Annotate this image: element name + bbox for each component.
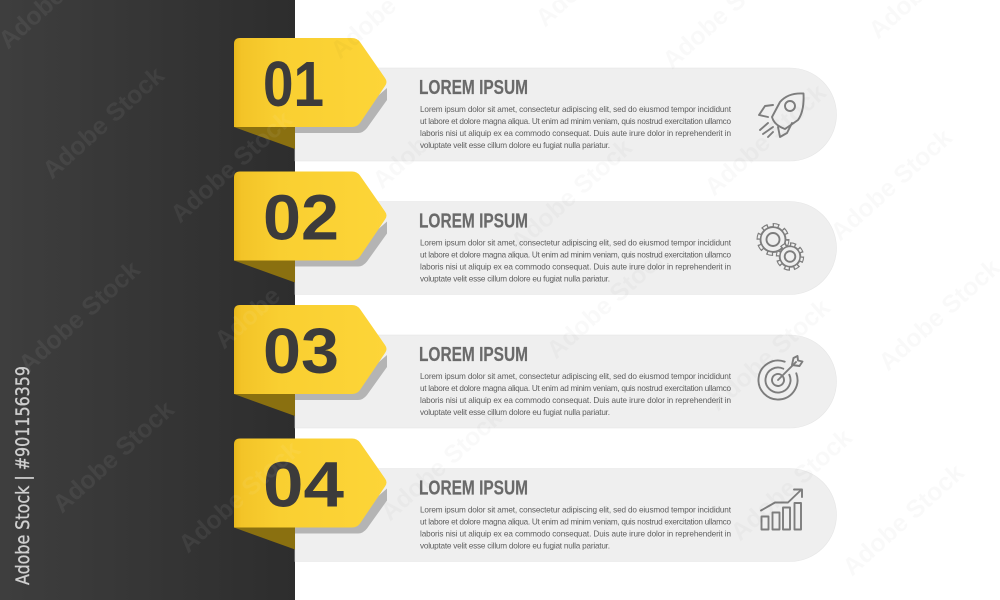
watermark on white area: Adobe Stock xyxy=(725,423,858,546)
row 4 body text xyxy=(420,506,732,550)
row 3 body text: voluptate velit esse cillum dolore eu fugiat nulla pariatur. xyxy=(420,408,610,417)
row 4 body text: voluptate velit esse cillum dolore eu fugiat nulla pariatur. xyxy=(420,542,610,550)
row 4 fold xyxy=(234,528,295,550)
watermark on white area: Adobe Stock xyxy=(375,403,508,526)
row 1: step 01 xyxy=(234,38,836,161)
watermark on white area: Adobe Stock xyxy=(541,241,674,364)
row 3: step 03 xyxy=(234,305,836,428)
row 4 body text: laboris nisi ut aliquip ex ea commodo consequat. Duis aute irure dolor in reprehenderit in xyxy=(420,530,731,538)
watermark on dark panel xyxy=(0,0,306,558)
icon: rising bar chart xyxy=(761,490,802,530)
row 1 heading: LOREM IPSUM xyxy=(419,77,528,99)
row 1 tag shadow xyxy=(295,88,387,133)
row 3 heading: LOREM IPSUM xyxy=(419,344,528,366)
watermark on dark panel: Adobe xyxy=(209,282,286,354)
row 1 body text: Lorem ipsum dolor sit amet, consectetur adipiscing elit, sed do eiusmod tempor incididunt xyxy=(420,105,732,114)
row 3 fold xyxy=(234,394,295,416)
row 2 fold xyxy=(234,260,295,282)
watermark on white area: Adobe xyxy=(367,122,444,194)
row 4 content bar xyxy=(295,468,836,562)
row 2 heading: LOREM IPSUM xyxy=(419,210,528,232)
row 4 number: 04 xyxy=(263,448,344,520)
icon: target with arrow xyxy=(758,356,802,400)
row 2 tag shadow xyxy=(295,222,387,266)
row 2 body text xyxy=(420,238,732,284)
row 3 content bar xyxy=(295,335,836,428)
icon: gears xyxy=(759,225,802,268)
watermark on white area: Adobe Stock xyxy=(837,458,970,581)
row 4 heading: LOREM IPSUM xyxy=(419,478,528,500)
watermark on white area: Adobe Stock xyxy=(703,293,836,416)
row 4: step 04 xyxy=(234,438,836,562)
row 4 yellow number tag xyxy=(234,438,386,528)
row 2 body text: ut labore et dolore magna aliqua. Ut enim ad minim veniam, quis nostrud exercitation ullamco xyxy=(420,250,731,260)
row 3 number: 03 xyxy=(263,315,339,387)
watermark on dark panel: Adobe Stock xyxy=(37,61,170,184)
row 1 body text xyxy=(420,105,732,150)
watermark on white area: Adobe Stock xyxy=(505,133,638,256)
panel: dark left background xyxy=(0,0,295,600)
row 3 tag shadow xyxy=(295,355,387,400)
row 1 body text: voluptate velit esse cillum dolore eu fugiat nulla pariatur. xyxy=(420,141,610,150)
row 2 body text: Lorem ipsum dolor sit amet, consectetur adipiscing elit, sed do eiusmod tempor incididunt xyxy=(420,238,732,248)
row 4 body text: ut labore et dolore magna aliqua. Ut enim ad minim veniam, quis nostrud exercitation ullamco xyxy=(420,518,731,526)
watermark on dark panel: Adobe Stock xyxy=(165,105,298,228)
row 1 body text: ut labore et dolore magna aliqua. Ut enim ad minim veniam, quis nostrud exercitation ullamco xyxy=(420,117,731,126)
vertical stock id text: Adobe Stock | #901156359 xyxy=(12,366,34,585)
watermark on white area: Adobe Stock xyxy=(825,123,958,246)
row 2: step 02 xyxy=(234,172,836,294)
row 2 number: 02 xyxy=(263,182,339,254)
row 3 body text: laboris nisi ut aliquip ex ea commodo consequat. Duis aute irure dolor in reprehenderit in xyxy=(420,396,731,405)
watermark on dark panel: Adobe Stock xyxy=(173,435,306,558)
row 2 content bar xyxy=(295,202,836,294)
row 1 body text: laboris nisi ut aliquip ex ea commodo consequat. Duis aute irure dolor in reprehenderit in xyxy=(420,129,731,138)
row 1 content bar xyxy=(295,68,836,161)
row 2 body text: voluptate velit esse cillum dolore eu fugiat nulla pariatur. xyxy=(420,274,610,284)
row 4 body text: Lorem ipsum dolor sit amet, consectetur adipiscing elit, sed do eiusmod tempor incididunt xyxy=(420,506,732,514)
row 4 tag shadow xyxy=(295,488,387,534)
row 1 yellow number tag xyxy=(234,38,386,127)
row 3 body text xyxy=(420,372,732,417)
row 2 body text: laboris nisi ut aliquip ex ea commodo consequat. Duis aute irure dolor in reprehenderit in xyxy=(420,262,731,272)
row 3 body text: ut labore et dolore magna aliqua. Ut enim ad minim veniam, quis nostrud exercitation ullamco xyxy=(420,384,731,393)
row 1 number: 01 xyxy=(263,48,324,120)
watermark on white area: Adobe Stock xyxy=(699,78,832,201)
watermark on dark panel: Adobe Stock xyxy=(13,255,146,378)
row 1 fold xyxy=(234,127,295,149)
row 3 yellow number tag xyxy=(234,305,386,394)
row 3 body text: Lorem ipsum dolor sit amet, consectetur adipiscing elit, sed do eiusmod tempor incididunt xyxy=(420,372,732,381)
row 2 yellow number tag xyxy=(234,172,386,260)
watermark on white area xyxy=(325,0,1000,581)
icon: rocket xyxy=(759,93,804,137)
watermark on dark panel: Adobe Stock xyxy=(47,395,180,518)
